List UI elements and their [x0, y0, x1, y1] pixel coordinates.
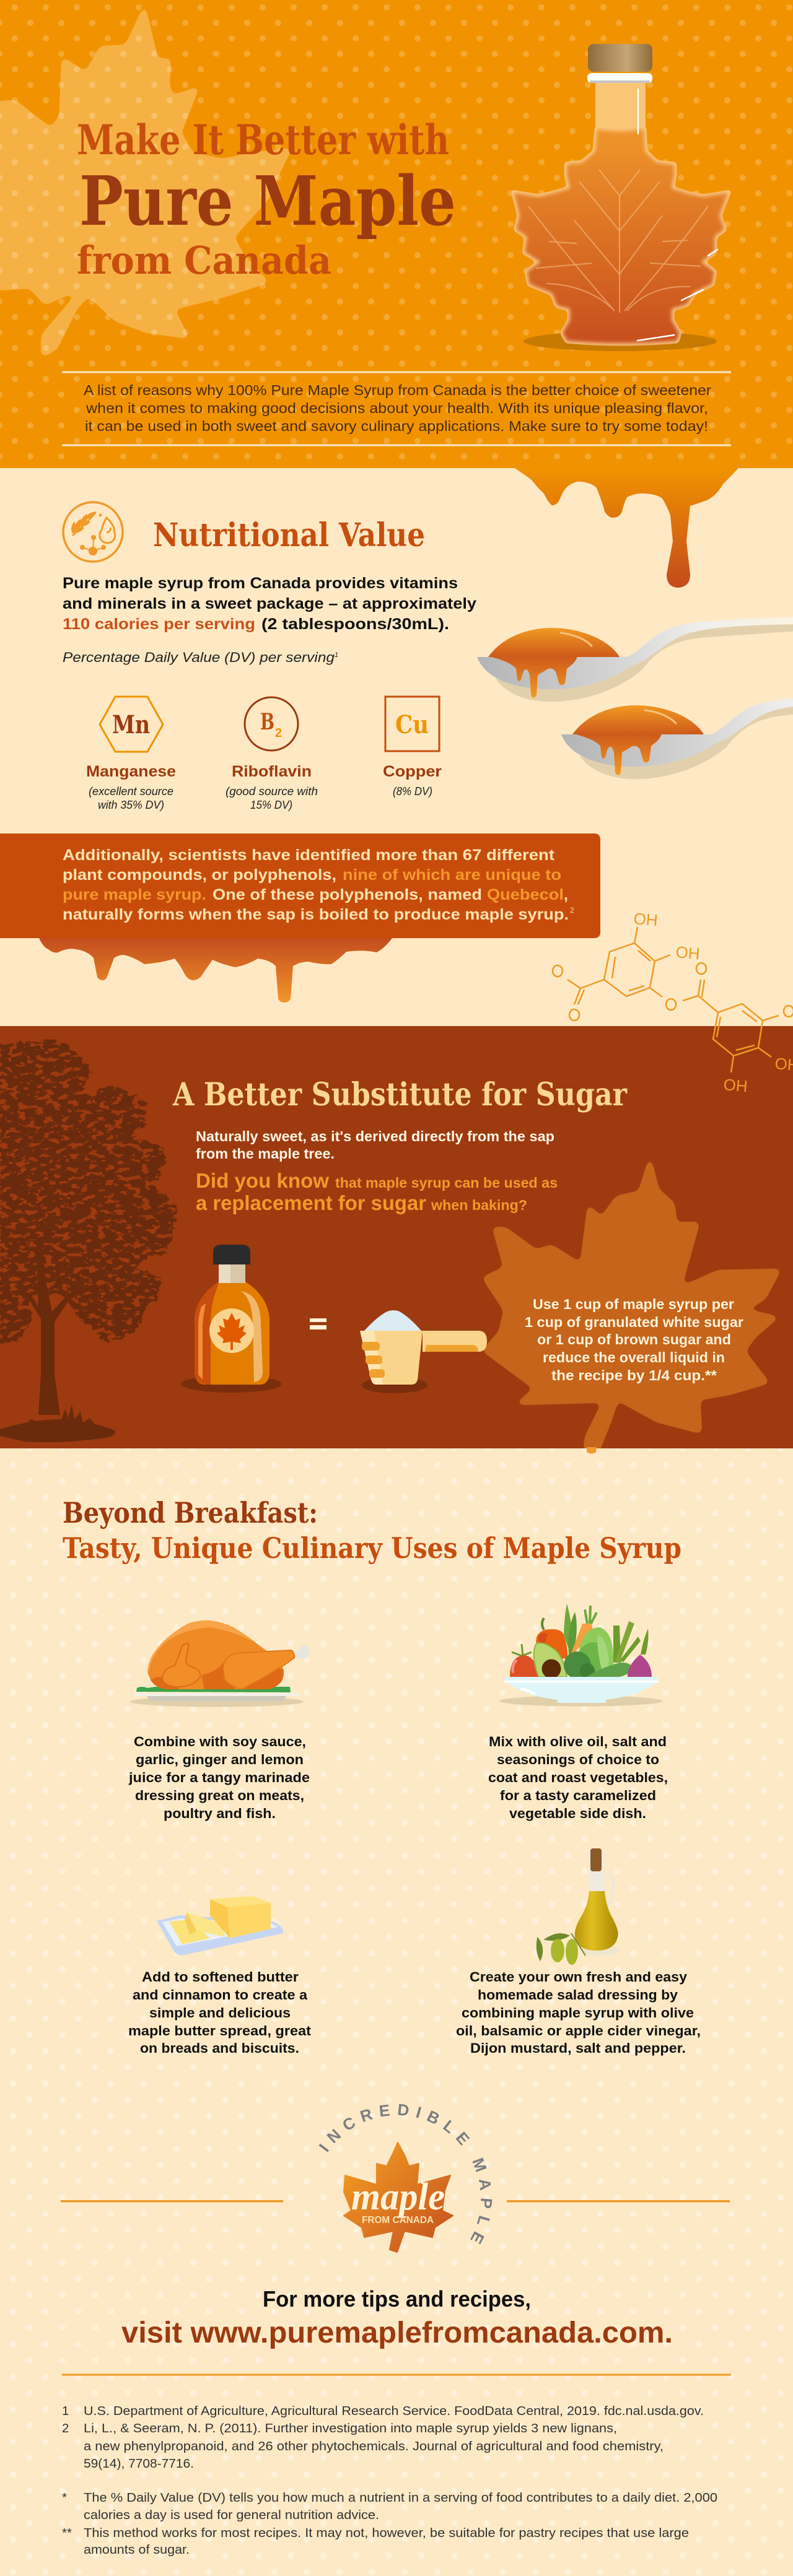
callout: polyphenols: 2 [570, 906, 574, 915]
icon: measuring cup of sugar [360, 1310, 487, 1393]
callout: polyphenols: One of these polyphenols, named [212, 886, 482, 903]
nutrient: manganese: (excellent source [89, 785, 173, 798]
text: butter use: Add to softened butter [142, 1969, 299, 1985]
callout: polyphenols: Additionally, scientists have identified more than 67 different [63, 846, 555, 864]
callout: polyphenols: Quebecol [487, 886, 564, 903]
text: vegetables use: vegetable side dish. [509, 1806, 646, 1821]
callout: polyphenols: pure maple syrup. [63, 886, 206, 903]
nutrient: riboflavin: Riboflavin [232, 763, 312, 780]
text: did you know: Did you know [196, 1169, 329, 1192]
footnotes: ** [62, 2526, 72, 2540]
panel: nutritional value [0, 468, 793, 1027]
icon: nutrition circle with wheat, drop and molecule [63, 502, 123, 562]
icon: quebecol molecule [553, 909, 793, 1095]
intro text block: A list of reasons why 100% Pure Maple Syrup from Canada is the better choice of sweetener [84, 382, 711, 398]
use: roasted vegetables [488, 1604, 668, 1821]
text: vegetables use: seasonings of choice to [497, 1752, 659, 1767]
nutrient: copper: Copper [383, 763, 442, 780]
panel: big maple leaf: or 1 cup of brown sugar and [537, 1331, 731, 1347]
text: vegetables use: for a tasty caramelized [500, 1788, 656, 1803]
icon: syrup drips from hero [515, 468, 738, 588]
icon: spoon with syrup, upper [477, 617, 793, 702]
footnotes: This method works for most recipes. It may not, however, be suitable for pastry recipes that use large [84, 2526, 689, 2540]
call to action [121, 2286, 673, 2349]
call to action: visit www.puremaplefromcanada.com. [121, 2317, 673, 2349]
nutrient: manganese: Manganese [86, 763, 176, 780]
icon: maple syrup bottle [181, 1245, 281, 1393]
heading: A Better Substitute for Sugar: A Better Substitute for Sugar [172, 1076, 628, 1113]
icon: pale maple leaf background [0, 9, 289, 355]
bottle veins [528, 170, 708, 313]
intro text block: when it comes to making good decisions about your health. With its unique pleasing flavor, [85, 400, 708, 416]
callout: polyphenols [0, 833, 600, 938]
molecule labels: OH [675, 942, 701, 963]
text: dressing use [456, 1969, 701, 2056]
text: dressing use: Create your own fresh and easy [470, 1969, 687, 1985]
use: maple butter [128, 1896, 312, 2056]
heading: Nutritional Value: Nutritional Value [153, 516, 425, 554]
heading: Beyond Breakfast: Beyond Breakfast: [63, 1496, 318, 1530]
heading: Beyond Breakfast [63, 1496, 681, 1565]
nutrient: riboflavin: B [260, 709, 274, 735]
footnotes: Li, L., & Seeram, N. P. (2011). Further investigation into maple syrup yields 3 new lignans, [84, 2421, 617, 2435]
footnotes: U.S. Department of Agriculture, Agricultural Research Service. FoodData Central, 2019. fdc.nal.usda.gov. [84, 2404, 704, 2418]
text: turkey use: garlic, ginger and lemon [136, 1752, 304, 1767]
title: Pure Maple [79, 161, 456, 241]
text: naturally sweet: Naturally sweet, as it's derived directly from the sap [196, 1128, 554, 1144]
intro paragraph: and minerals in a sweet package – at approximately [63, 595, 476, 612]
text: turkey use: Combine with soy sauce, [134, 1734, 306, 1749]
intro text block [62, 372, 731, 446]
nutrient: copper: (8% DV) [393, 785, 432, 798]
text: butter use [128, 1969, 312, 2056]
logo: Incredible Maple: INCREDIBLE MAPLE [318, 2104, 492, 2244]
nutrient: copper: Cu [395, 710, 429, 739]
icon: olive oil bottle [537, 1848, 620, 1965]
nutrient: manganese [86, 697, 176, 811]
footnotes: 1 [62, 2404, 69, 2418]
callout: polyphenols: plant compounds, or polyphenols, [63, 866, 336, 884]
nutrient: copper [383, 697, 442, 798]
icon: spoon with syrup, lower [561, 694, 793, 779]
text: did you know: when baking? [431, 1197, 527, 1213]
footnotes: 59(14), 7708-7716. [84, 2456, 194, 2471]
footnotes: calories a day is used for general nutrition advice. [84, 2508, 379, 2522]
footnotes: amounts of sugar. [84, 2543, 190, 2557]
panel: better substitute for sugar [0, 1026, 793, 1450]
footnotes: 2 [62, 2421, 69, 2435]
use: salad dressing [456, 1848, 701, 2056]
panel: big maple leaf: 1 cup of granulated white sugar [525, 1314, 743, 1330]
icon: roast turkey [130, 1621, 309, 1707]
molecule labels: OH [722, 1075, 748, 1095]
panel: hero [0, 0, 793, 468]
intro paragraph [63, 575, 476, 633]
icon: vegetable bowl [499, 1604, 663, 1707]
drips under callout [39, 938, 392, 1003]
footnotes: The % Daily Value (DV) tells you how much a nutrient in a serving of food contributes to a daily diet. 2,000 [84, 2491, 717, 2505]
title: from Canada [77, 238, 331, 283]
icon: tree silhouette [0, 1041, 177, 1442]
icon: maple leaf syrup bottle [512, 44, 730, 351]
intro paragraph: 110 calories per serving [63, 616, 255, 633]
intro paragraph: (2 tablespoons/30mL). [261, 616, 449, 633]
DV caption: Percentage Daily Value (DV) per serving [63, 650, 335, 665]
text: naturally sweet [196, 1128, 554, 1162]
nutrient: manganese: with 35% DV) [98, 799, 164, 811]
use: turkey marinade [128, 1621, 310, 1821]
text: turkey use: dressing great on meats, [135, 1788, 304, 1803]
text: butter use: simple and delicious [149, 2005, 291, 2021]
footnotes: * [62, 2491, 67, 2505]
text: vegetables use: coat and roast vegetables, [488, 1770, 668, 1785]
logo: Incredible Maple: maple [351, 2176, 445, 2218]
nutrient: manganese: Mn [112, 710, 150, 739]
text: did you know: a replacement for sugar [196, 1191, 426, 1214]
text: turkey use [128, 1734, 310, 1821]
heading: Beyond Breakfast: Tasty, Unique Culinary Uses of Maple Syrup [63, 1531, 681, 1565]
call to action: For more tips and recipes, [263, 2286, 531, 2312]
nutrient: riboflavin: 15% DV) [250, 799, 292, 811]
footnotes: a new phenylpropanoid, and 26 other phytochemicals. Journal of agricultural and food chemistry, [84, 2439, 664, 2453]
text: did you know: that maple syrup can be used as [335, 1175, 558, 1191]
text: dressing use: combining maple syrup with olive [462, 2005, 694, 2021]
text: dressing use: homemade salad dressing by [478, 1987, 678, 2003]
text: naturally sweet: from the maple tree. [196, 1146, 335, 1162]
panel: big maple leaf: the recipe by 1/4 cup.** [551, 1367, 717, 1383]
callout: polyphenols: , [564, 886, 568, 903]
intro text block: it can be used in both sweet and savory culinary applications. Make sure to try some today! [85, 418, 708, 434]
panel: beyond breakfast [10, 1447, 784, 2575]
logo: Incredible Maple [61, 2104, 730, 2253]
panel: big maple leaf [484, 1161, 779, 1450]
molecule labels: OH [633, 909, 659, 929]
panel: big maple leaf: reduce the overall liquid in [543, 1349, 725, 1365]
intro paragraph: Pure maple syrup from Canada provides vitamins [63, 575, 458, 592]
callout: polyphenols: nine of which are unique to [343, 866, 561, 884]
text: butter use: and cinnamon to create a [133, 1987, 307, 2003]
text: did you know [196, 1169, 558, 1214]
text: turkey use: juice for a tangy marinade [128, 1770, 310, 1785]
nutrient: riboflavin [226, 697, 318, 811]
DV caption: 1 [335, 651, 338, 659]
footnotes [62, 2404, 717, 2557]
text: vegetables use: Mix with olive oil, salt and [489, 1734, 667, 1749]
nutrient: riboflavin: 2 [275, 726, 282, 740]
title: Make It Better with [77, 116, 449, 164]
nutrient: riboflavin: (good source with [226, 785, 318, 798]
text: dressing use: oil, balsamic or apple cider vinegar, [456, 2023, 701, 2039]
text: dressing use: Dijon mustard, salt and pepper. [470, 2040, 686, 2056]
text: butter use: maple butter spread, great [128, 2023, 312, 2039]
text: butter use: on breads and biscuits. [140, 2040, 299, 2056]
text: turkey use: poultry and fish. [164, 1806, 276, 1821]
callout: polyphenols: naturally forms when the sap is boiled to produce maple syrup. [63, 906, 569, 923]
logo: Incredible Maple: FROM CANADA [362, 2215, 434, 2226]
icon: butter on a dish [157, 1896, 283, 1955]
panel: big maple leaf: Use 1 cup of maple syrup per [533, 1296, 734, 1312]
title [77, 116, 456, 283]
text: vegetables use [488, 1734, 668, 1821]
molecule labels [633, 909, 793, 1095]
icon: equals sign [310, 1318, 326, 1329]
